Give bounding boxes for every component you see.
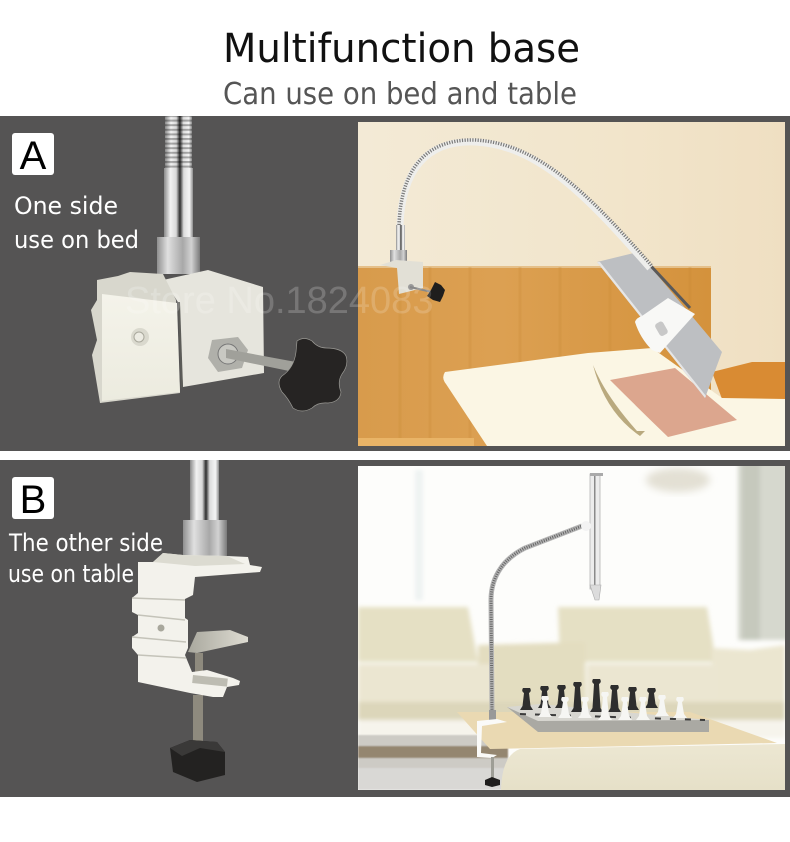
- black star knob: [279, 338, 347, 411]
- clamp close-up, bed side: [91, 116, 347, 411]
- bed linen: [443, 348, 785, 446]
- holder: [590, 474, 600, 589]
- photo: stand on a table: [358, 460, 788, 790]
- side table: [712, 362, 785, 400]
- clamp and knob: [380, 250, 445, 302]
- clamp body: [132, 553, 262, 697]
- black screw knob: [170, 740, 225, 782]
- rug: [358, 735, 508, 790]
- watermark: Store No.1824083: [125, 280, 433, 322]
- chess board: [507, 679, 709, 732]
- coffee table: [457, 712, 777, 749]
- caption: other side use on table: [8, 529, 163, 588]
- panel A: use on bed: Store No.1824083: [125, 280, 433, 322]
- photo: stand on a bed: [358, 122, 785, 446]
- caption: other side use on table: use on table: [8, 560, 134, 588]
- middle plate: [188, 630, 248, 653]
- caption: one side use on bed: use on bed: [14, 226, 139, 254]
- blurred room background: [358, 460, 788, 738]
- panel A: use on bed: [0, 116, 790, 451]
- table stand: [477, 473, 603, 787]
- pendant lamp: [646, 468, 710, 492]
- tablet: [597, 252, 722, 398]
- badge B: [12, 477, 54, 522]
- panel B: use on table: [0, 460, 790, 797]
- caption: one side use on bed: [14, 192, 139, 254]
- gooseneck arm: [396, 140, 652, 268]
- pink pillow: [610, 368, 737, 437]
- ottoman: [501, 744, 785, 790]
- badge A: A: [20, 134, 47, 178]
- title: Multifunction base: [223, 26, 580, 72]
- small clamp: [477, 719, 507, 758]
- badge A: [12, 133, 54, 178]
- caption: one side use on bed: One side: [14, 192, 118, 220]
- badge B: B: [20, 478, 46, 522]
- headboard: [358, 267, 711, 446]
- white chess pieces: [538, 692, 687, 720]
- clamp close-up, table side: [132, 460, 262, 782]
- black chess pieces: [520, 679, 658, 712]
- caption: other side use on table: The other side: [8, 529, 163, 557]
- holder clip: [635, 298, 695, 353]
- subtitle: Can use on bed and table: [223, 77, 577, 112]
